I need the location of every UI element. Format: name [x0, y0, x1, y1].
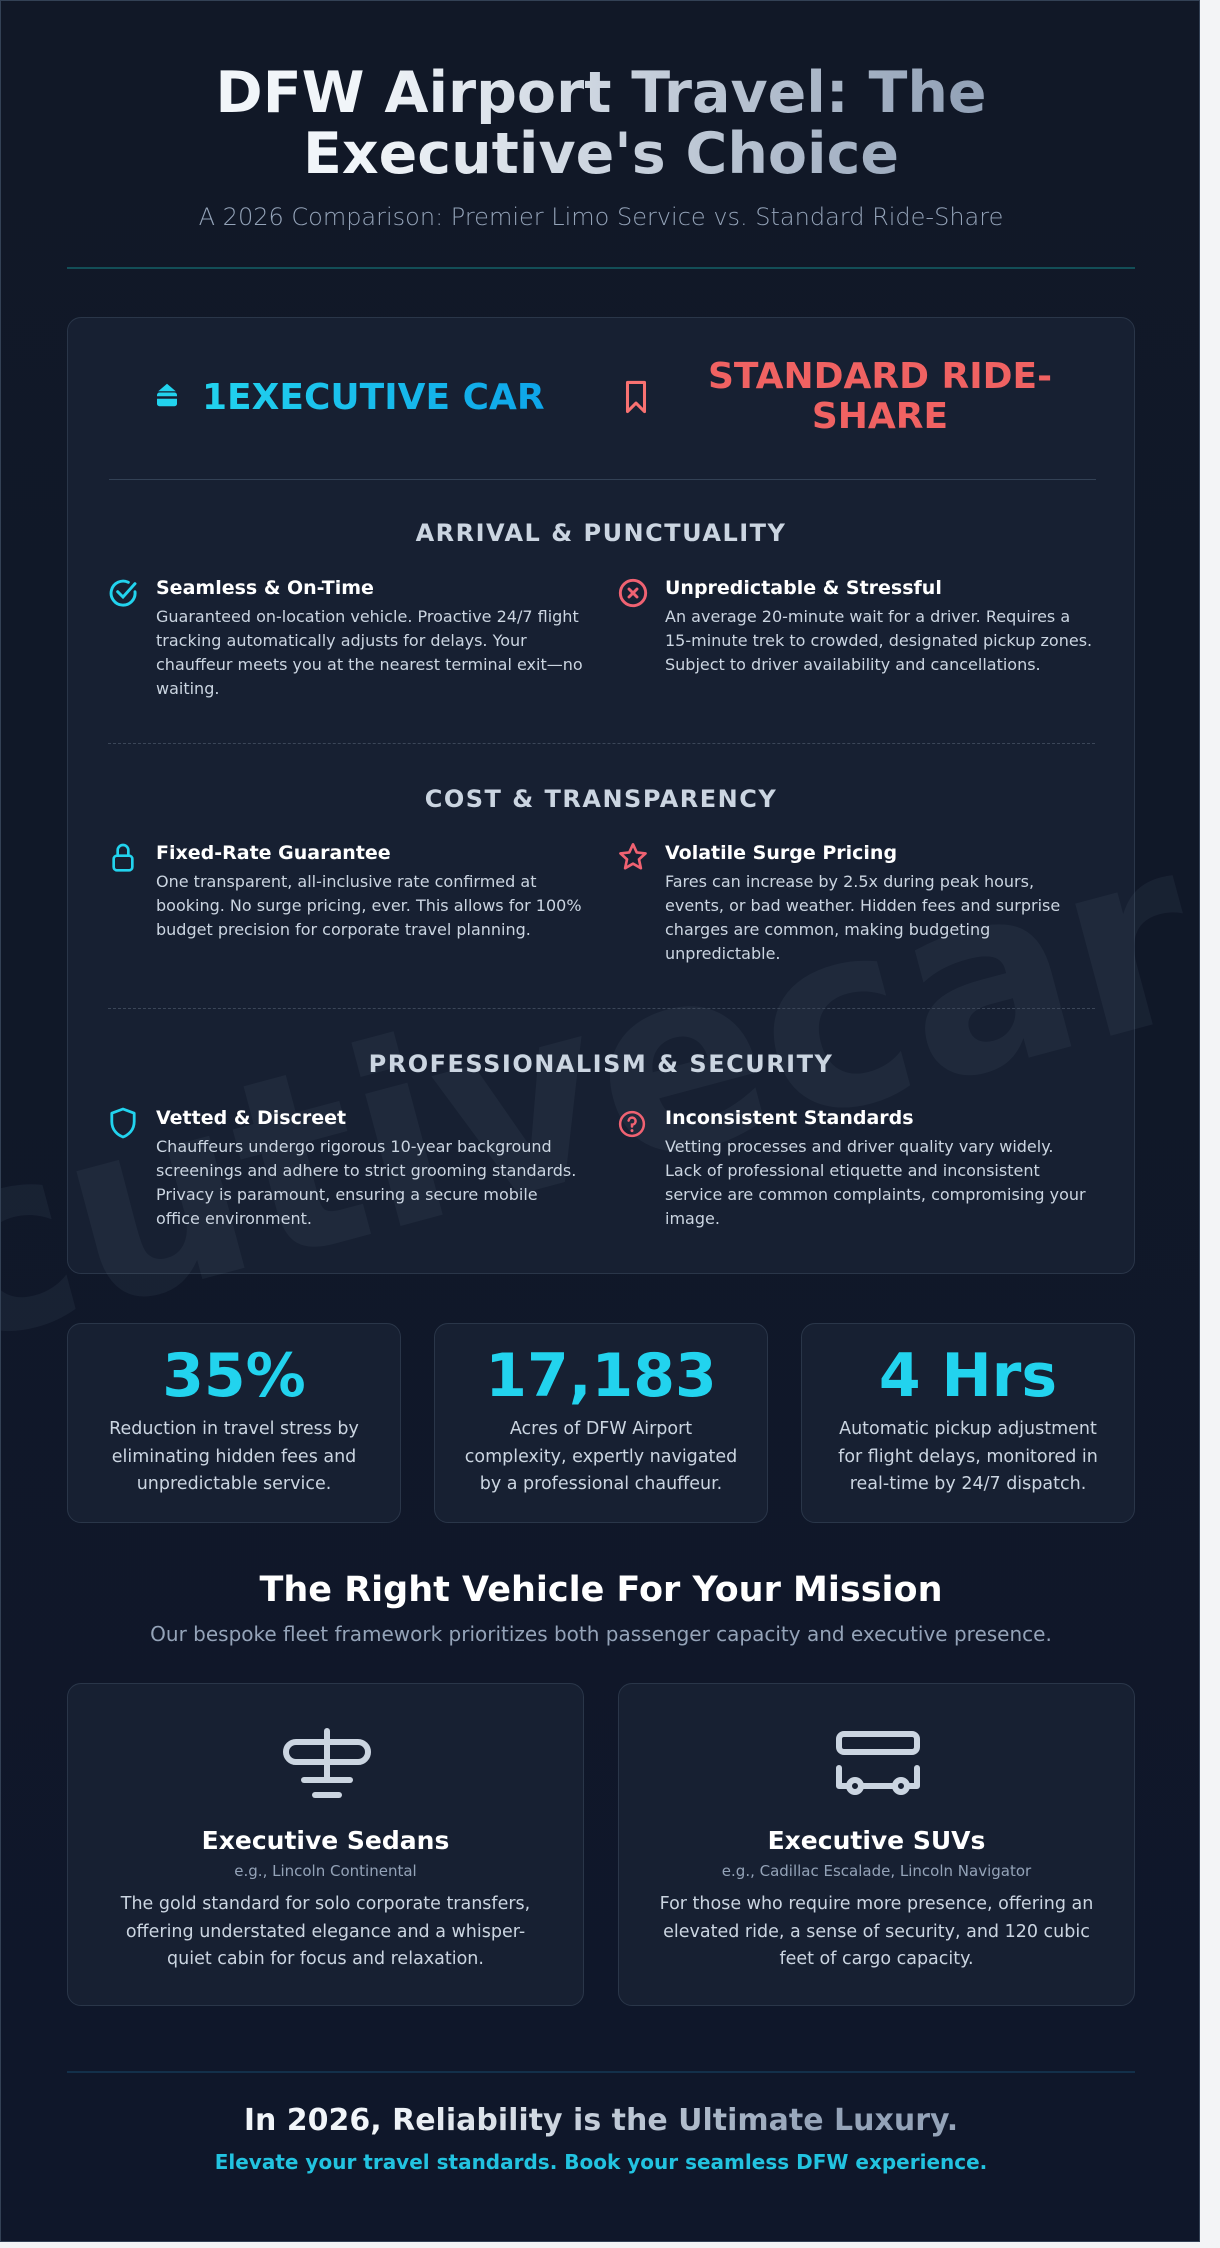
- footer heading: In 2026, Reliability is the Ultimate Luxury.: [244, 2103, 958, 2138]
- card: sedans: [67, 1683, 584, 2006]
- item: fixed rate: One transparent, all-inclusive rate confirmed at booking. No surge pricing, ever. This allows for 100% budget precision for corporate travel planning.: [156, 872, 582, 939]
- item: vetted: Chauffeurs undergo rigorous 10-year background screenings and adhere to strict grooming standards. Privacy is paramount, ensuring a secure mobile office environment.: [156, 1137, 576, 1228]
- title: DFW Airport Travel: The: [215, 60, 987, 126]
- footer cta: Elevate your travel standards. Book your seamless DFW experience.: [215, 2150, 987, 2174]
- icon: briefcase: [157, 384, 177, 406]
- item: unpredictable: An average 20-minute wait for a driver. Requires a 15-minute trek to crowded, designated pickup zones. Subject to driver availability and cancellations.: [665, 607, 1092, 674]
- item: surge: Fares can increase by 2.5x during peak hours, events, or bad weather. Hidden fees and surprise charges are common, making budgeting unpredictable.: [665, 872, 1060, 963]
- header: standard ride-share: SHARE: [812, 396, 948, 437]
- header: standard ride-share: [708, 356, 1052, 437]
- card: suvs: For those who require more presence, offering an elevated ride, a sense of security, and 120 cubic feet of cargo capacity.: [660, 1894, 1093, 1969]
- card: sedans: Executive Sedans: [202, 1826, 449, 1855]
- card: suvs: Executive SUVs: [768, 1826, 985, 1855]
- item: unpredictable: [665, 577, 1092, 674]
- card: suvs: [618, 1683, 1135, 2006]
- item: fixed rate: Fixed-Rate Guarantee: [156, 842, 391, 864]
- heading: cost: COST & TRANSPARENCY: [425, 785, 777, 813]
- stat: 35%: [67, 1323, 401, 1523]
- stat: 4 hrs: [801, 1323, 1135, 1523]
- icon: star: [619, 843, 647, 870]
- stat: 35%: 35%: [162, 1341, 306, 1411]
- card: suvs: e.g., Cadillac Escalade, Lincoln Navigator: [722, 1862, 1031, 1880]
- item: fixed rate: [156, 842, 582, 939]
- subheading: vehicles: Our bespoke fleet framework prioritizes both passenger capacity and executive presence.: [150, 1622, 1052, 1646]
- item: seamless: Seamless & On-Time: [156, 577, 374, 599]
- header: 1executive car: 1EXECUTIVE CAR: [202, 377, 545, 418]
- header: standard ride-share: STANDARD RIDE-: [708, 356, 1052, 397]
- stat: 4 hrs: Automatic pickup adjustment for flight delays, monitored in real-time by 24/7 dispatch.: [838, 1419, 1098, 1494]
- icon: question: [618, 1110, 646, 1138]
- item: vetted: Vetted & Discreet: [156, 1107, 346, 1129]
- title: Executive's Choice: [303, 121, 899, 187]
- panel: comparison: [67, 317, 1135, 1274]
- card: sedans: The gold standard for solo corporate transfers, offering understated elegance and a whisper-quiet cabin for focus and relaxation.: [121, 1894, 530, 1969]
- heading: professionalism: PROFESSIONALISM & SECURITY: [369, 1050, 833, 1078]
- icon: check circle: [110, 580, 137, 607]
- heading: arrival: ARRIVAL & PUNCTUALITY: [416, 519, 786, 547]
- icon: suv: [836, 1731, 920, 1795]
- stat: 17,183: 17,183: [485, 1341, 717, 1411]
- stat: 35%: Reduction in travel stress by eliminating hidden fees and unpredictable service.: [109, 1419, 359, 1494]
- icon: bookmark: [626, 380, 646, 414]
- subtitle: A 2026 Comparison: Premier Limo Service vs. Standard Ride-Share: [199, 203, 1003, 231]
- stat: 4 hrs: 4 Hrs: [879, 1341, 1057, 1411]
- icon: sedan: [283, 1728, 371, 1798]
- item: inconsistent: Vetting processes and driver quality vary widely. Lack of professional etiquette and inconsistent service are common complaints, compromising your image.: [665, 1137, 1086, 1228]
- item: seamless: Guaranteed on-location vehicle. Proactive 24/7 flight tracking automatically adjusts for delays. Your chauffeur meets you at the nearest terminal exit—no waiting.: [156, 607, 583, 698]
- item: surge: Volatile Surge Pricing: [665, 842, 897, 864]
- icon: x circle: [618, 578, 648, 608]
- item: inconsistent: Inconsistent Standards: [665, 1107, 914, 1129]
- title: [1, 63, 1201, 185]
- icon: shield: [110, 1108, 136, 1138]
- item: unpredictable: Unpredictable & Stressful: [665, 577, 942, 599]
- heading: vehicles: The Right Vehicle For Your Mission: [259, 1570, 942, 1610]
- stat: 17,183: Acres of DFW Airport complexity, expertly navigated by a professional chauffeur.: [465, 1419, 737, 1494]
- stat: 17,183: [434, 1323, 768, 1523]
- icon: lock: [112, 844, 134, 872]
- card: sedans: e.g., Lincoln Continental: [234, 1862, 417, 1880]
